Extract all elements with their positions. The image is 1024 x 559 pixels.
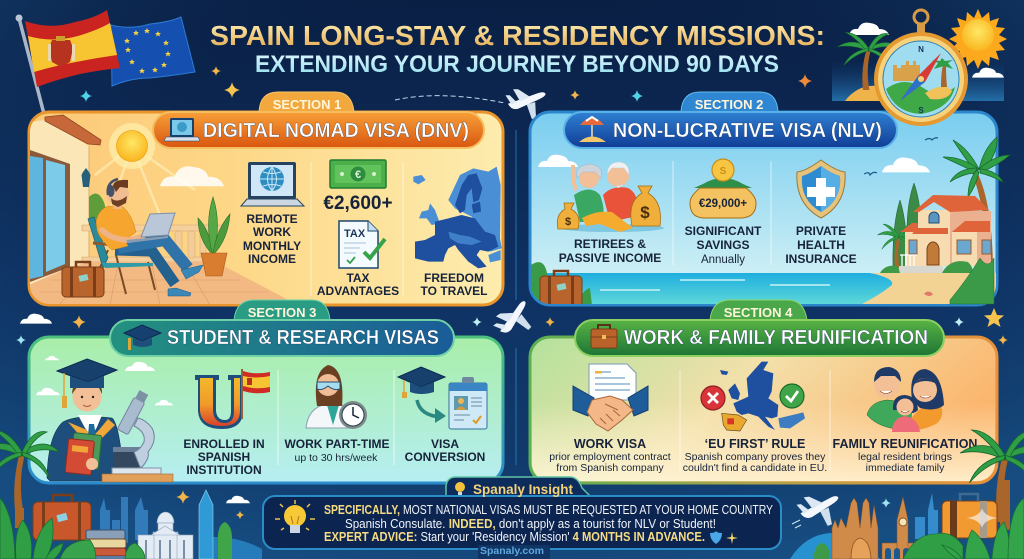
feature labels: legal resident brings	[858, 451, 952, 463]
tab and heading: section 3: STUDENT & RESEARCH VISAS	[167, 326, 439, 349]
icon: compass with island scene	[832, 9, 1007, 126]
icon: Spain and EU flags	[16, 10, 195, 114]
feature labels: ‘EU FIRST’ RULE	[705, 437, 805, 451]
tab and heading: section 1: DIGITAL NOMAD VISA (DNV)	[203, 119, 469, 142]
feature labels: up to 30 hrs/week	[295, 452, 378, 464]
icon: tax document: TAX	[344, 228, 366, 240]
feature labels: SIGNIFICANT	[685, 224, 762, 238]
feature labels	[243, 212, 487, 298]
feature labels: INSTITUTION	[186, 463, 262, 477]
feature labels	[549, 437, 977, 474]
feature labels: Spanish company proves they	[685, 451, 826, 463]
feature labels: Annually	[701, 254, 745, 266]
callout: Spanaly insight	[263, 477, 781, 559]
tab and heading: section 2	[564, 92, 897, 148]
illustration: graduate with microscope	[47, 359, 173, 482]
skyline and foliage: bottom right	[790, 430, 1024, 559]
icon: savings pot with coin	[690, 159, 756, 218]
scene: terrace with remote worker	[29, 115, 300, 306]
title: EXTENDING YOUR JOURNEY BEYOND 90 DAYS	[255, 51, 779, 78]
feature labels: SAVINGS	[696, 238, 750, 252]
icon: health shield	[797, 160, 845, 218]
footer: site name: Spanaly.com	[480, 545, 544, 557]
title: SPAIN LONG-STAY & RESIDENCY MISSIONS:	[210, 20, 825, 51]
feature labels: MONTHLY	[243, 239, 301, 253]
insight text: EXPERT ADVICE: Start your 'Residency Mission' 4 MONTHS IN ADVANCE.	[324, 530, 705, 544]
illustration: villa and palms	[877, 137, 1010, 304]
panel: section 4 work and family reunification	[530, 337, 997, 483]
heading: Spanaly Insight	[473, 481, 573, 497]
plane: between sections	[490, 298, 540, 345]
main palm	[943, 137, 1010, 268]
panel: section 2 non-lucrative visa	[530, 112, 1010, 306]
tab and heading: section 4: SECTION 4	[724, 305, 793, 320]
laptop	[141, 213, 175, 237]
icon: small bulb	[455, 482, 465, 495]
icon: retired couple with money bags: $	[565, 216, 571, 228]
icon: savings pot with coin: €29,000+	[699, 198, 747, 210]
icon: graduation cap to residence card	[398, 367, 487, 429]
feature labels: REMOTE	[246, 212, 298, 226]
insight text: SPECIFICALLY, MOST NATIONAL VISAS MUST BE REQUESTED AT YOUR HOME COUNTRY	[324, 503, 773, 517]
icon: compass with island scene: N	[918, 45, 924, 54]
sun	[109, 123, 155, 169]
label: monthly income amount: €2,600+	[323, 193, 393, 214]
icon: laptop with globe	[241, 162, 304, 206]
feature labels: from Spanish company	[556, 462, 664, 474]
feature labels: RETIREES &	[574, 237, 646, 251]
icon: retired couple with money bags	[557, 162, 664, 232]
icon: EU map with cross and check	[701, 362, 805, 431]
icon: contract and handshake	[573, 364, 648, 431]
title	[210, 20, 825, 78]
scene: beach and sea	[531, 138, 997, 306]
tab and heading: section 2: SECTION 2	[695, 97, 763, 112]
tab and heading: section 3	[110, 300, 454, 356]
feature labels: INSURANCE	[785, 252, 857, 266]
feature labels: immediate family	[866, 462, 945, 474]
icon: euro banknote: €	[355, 169, 361, 181]
feature labels: prior employment contract	[549, 451, 671, 463]
feature labels: PRIVATE	[796, 224, 846, 238]
feature labels: ADVANTAGES	[317, 284, 399, 298]
person	[96, 179, 203, 296]
chair	[98, 250, 155, 294]
tab and heading: section 1	[153, 92, 484, 148]
insight text: Spanish Consulate. INDEED, don't apply as a tourist for NLV or Student!	[345, 517, 716, 531]
flight path and plane: top	[395, 89, 545, 119]
feature labels: INCOME	[248, 252, 296, 266]
feature labels: WORK PART-TIME	[284, 437, 390, 451]
feature labels: VISA	[431, 437, 459, 451]
panel: section 3 student and research visas	[29, 337, 503, 483]
insight text	[324, 503, 773, 544]
tab and heading: section 1: SECTION 1	[273, 97, 341, 112]
icon: university U and Spanish flag	[195, 369, 270, 429]
icon: family	[867, 367, 944, 432]
tab and heading: section 4: WORK & FAMILY REUNIFICATION	[624, 326, 928, 349]
icon: Europe map	[413, 167, 502, 268]
feature labels	[183, 437, 485, 477]
icon: retired couple with money bags: $	[640, 203, 650, 222]
feature labels: WORK	[253, 225, 291, 239]
skyline and foliage: bottom left	[0, 430, 262, 559]
feature labels: CONVERSION	[405, 450, 485, 464]
feature labels: WORK VISA	[574, 437, 646, 451]
feature labels: ENROLLED IN	[183, 437, 265, 451]
tab and heading: section 4	[575, 300, 944, 356]
icon: savings pot with coin: S	[720, 166, 727, 177]
icon: tax document	[339, 221, 385, 268]
feature labels: FREEDOM	[424, 271, 484, 285]
feature labels: FAMILY REUNIFICATION	[833, 437, 977, 451]
feature labels: TAX	[346, 271, 370, 285]
feature labels: TO TRAVEL	[421, 284, 487, 298]
tab and heading: section 3: SECTION 3	[248, 305, 316, 320]
feature labels: couldn't find a candidate in EU.	[683, 462, 827, 474]
panel: section 1 digital nomad visa	[29, 112, 503, 306]
icon: euro banknote	[330, 160, 386, 188]
decorative sparkles	[16, 66, 1008, 519]
tab and heading: section 2: NON-LUCRATIVE VISA (NLV)	[613, 119, 882, 142]
feature labels	[559, 224, 857, 266]
icon: compass with island scene: S	[918, 106, 924, 115]
plant	[198, 197, 230, 276]
feature labels: HEALTH	[797, 238, 845, 252]
icon: light bulb	[275, 500, 315, 533]
icon: researcher with clock	[306, 365, 367, 429]
feature labels: SPANISH	[198, 450, 250, 464]
feature labels: PASSIVE INCOME	[559, 251, 661, 265]
